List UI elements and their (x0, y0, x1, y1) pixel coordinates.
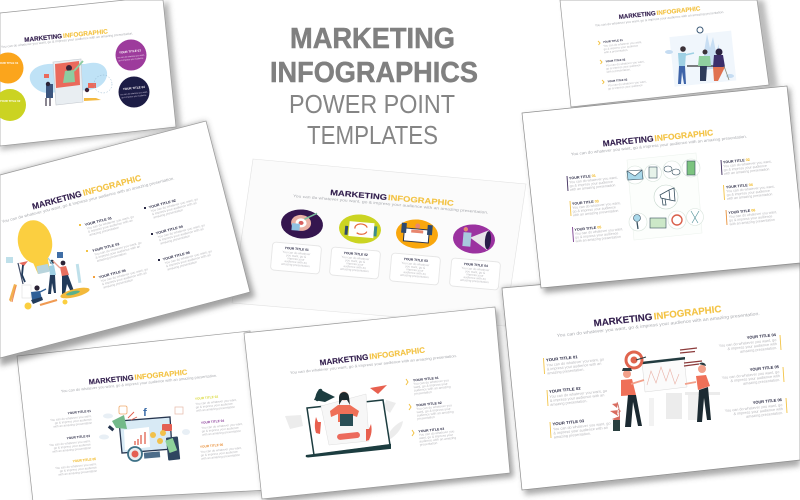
heading (88, 367, 188, 386)
right list: & impress your audience with (727, 342, 777, 351)
right list: with an amazing presentation (202, 429, 241, 437)
icon circle: cycle board (338, 213, 382, 245)
left list: 05 (597, 225, 601, 230)
card 4: YOUR TITLE 04 (464, 262, 488, 268)
right list: YOUR TITLE 04 (201, 419, 225, 425)
list: You can do whatever you (413, 378, 449, 386)
subtitle: You can do whatever you want, go & impress your audience with an amazing presentation. (595, 10, 725, 27)
icon circle: target (280, 208, 324, 240)
left list: amazing presentation. (550, 399, 588, 407)
list items: go & impress your audience (603, 44, 639, 51)
right list: with an amazing presentation (727, 192, 773, 201)
circle: navy (118, 76, 150, 108)
slide: bottom right presentation (502, 262, 800, 495)
subtitle: You can do whatever you want, go & impress your audience with an amazing presentation. (557, 311, 760, 338)
right list (195, 393, 244, 461)
card 2: impress your (346, 261, 364, 267)
heading: INFOGRAPHIC (134, 367, 188, 382)
left list: You can do whatever you want, go (546, 357, 604, 367)
illustration: social media tablet (30, 59, 112, 106)
right list: YOUR TITLE 06 (200, 443, 224, 449)
list: amazing presentation (96, 251, 127, 263)
illustration: team presenting chart (610, 348, 720, 431)
circle: navy: YOUR TITLE 04 (123, 85, 145, 91)
left list: with an amazing presentation (53, 421, 93, 429)
list: & impress your audience with an (95, 244, 141, 260)
list: amazing presentation (167, 260, 198, 271)
heading: MARKETING (88, 373, 134, 386)
slide: center four circles (232, 159, 526, 326)
slide: right outline icons (522, 86, 800, 293)
card 2 (329, 247, 381, 279)
card 2: You can do whatever (341, 255, 370, 261)
list: audience with an amazing (419, 436, 457, 444)
circle: purple (116, 40, 146, 70)
card 2: YOUR TITLE 02 (344, 251, 368, 257)
list: & impress your audience with an (152, 201, 197, 216)
right list: YOUR TITLE (728, 209, 751, 215)
list: YOUR TITLE 02 (148, 199, 176, 209)
right list: amazing presentation. (743, 378, 780, 386)
card 1: amazing presentation (281, 262, 310, 268)
main title: POWER POINT (289, 91, 455, 119)
list: & impress your audience with an (88, 218, 133, 234)
list items: with a presentation. (604, 48, 629, 54)
heading: INFOGRAPHIC (369, 346, 426, 361)
list (79, 193, 214, 290)
list: You can do whatever you want, go (157, 223, 206, 239)
list: want, go & impress your (416, 407, 452, 414)
left list: & impress your audience with an (550, 393, 605, 403)
card 2: you want, go & (345, 258, 365, 264)
left list: You can do whatever you want, (569, 176, 618, 184)
left list: amazing presentation. (547, 368, 585, 375)
heading: INFOGRAPHIC (388, 193, 455, 208)
circle: navy: go & impress your audience (122, 95, 147, 99)
list: & impress your audience with an (166, 253, 211, 268)
left list: YOUR TITLE 01 (546, 354, 579, 362)
list: YOUR TITLE 04 (155, 225, 183, 235)
list: YOUR TITLE 06 (162, 251, 190, 261)
heading (24, 28, 109, 44)
card 4: audience with an (463, 275, 486, 281)
main title: INFOGRAPHICS (270, 57, 478, 89)
right list: You can do whatever you want, (726, 185, 775, 193)
right list: You can do whatever you want, (201, 422, 243, 430)
heading: INFOGRAPHIC (63, 28, 109, 40)
card 3: You can do whatever (401, 261, 430, 267)
card 3: YOUR TITLE 03 (404, 257, 428, 263)
left list: go & impress your audience (572, 205, 616, 214)
main title: MARKETING (290, 23, 455, 55)
right list: You can do whatever you want, go (719, 338, 777, 348)
left list: & impress your audience with an (547, 362, 602, 371)
circle: orange (0, 52, 24, 84)
left list (48, 409, 98, 477)
heading: INFOGRAPHIC (82, 173, 142, 198)
left list: with an amazing presentation (58, 469, 98, 477)
circle: navy: You can do whatever you want, (120, 91, 148, 96)
list: YOUR TITLE 01 (84, 216, 112, 227)
list: You can do whatever you want, go (164, 249, 213, 265)
slide: bottom left monitor (17, 331, 278, 500)
left list: with an amazing presentation (575, 235, 621, 243)
heading: MARKETING (602, 133, 654, 148)
list: amazing presentation (103, 278, 134, 289)
right list: go & impress your audience (729, 214, 773, 223)
right list: with an amazing presentation (729, 218, 775, 226)
card 1: You can do whatever (282, 250, 311, 256)
list: You can do whatever you (419, 429, 455, 437)
list: want, go & impress your (419, 433, 454, 440)
card 2: amazing presentation (340, 267, 369, 273)
left list: YOUR TITLE 05 (72, 457, 96, 463)
right list: go & impress your audience (202, 426, 239, 433)
left list: YOUR TITLE (569, 174, 592, 180)
illustration: marketing outline icons (626, 153, 704, 240)
left list: You can do whatever you want, (572, 201, 621, 210)
left list: go & impress your audience (60, 465, 97, 473)
slide: bottom center megaphone laptop (244, 307, 514, 500)
list: & impress your audience with an (159, 227, 204, 242)
left list: YOUR TITLE (574, 226, 597, 232)
list items: with a presentation. (606, 67, 631, 74)
list items: YOUR TITLE 02 (605, 57, 626, 63)
illustration: marketing monitor (99, 406, 190, 461)
heading: MARKETING (319, 353, 369, 367)
left list (567, 172, 624, 243)
list: & impress your audience with an (102, 271, 147, 286)
list: amazing presentation (153, 208, 184, 219)
left list: You can do whatever you want, (575, 227, 623, 236)
left list: YOUR TITLE (572, 200, 595, 206)
main title: TEMPLATES (307, 122, 438, 150)
illustration: megaphone woman on laptop (285, 385, 403, 456)
heading (31, 173, 142, 211)
list: amazing presentation (160, 234, 191, 245)
slide: left light bulb (0, 121, 255, 366)
right list: & impress your audience with (733, 407, 783, 416)
subtitle: You can do whatever you want, go & impress your audience with an amazing presentation. (571, 134, 747, 156)
left list: 03 (595, 199, 599, 204)
heading: INFOGRAPHIC (656, 5, 701, 17)
left list: You can do whatever you want, go (553, 421, 611, 431)
left list: go & impress your audience (569, 180, 613, 188)
card 4 (449, 258, 501, 290)
list: want, go & impress your (413, 382, 449, 389)
heading: MARKETING (24, 33, 63, 44)
right list (718, 332, 787, 421)
left list: go & impress your audience (54, 442, 91, 450)
left list: YOUR TITLE 02 (549, 386, 582, 394)
left list: & impress your audience with an (553, 426, 608, 435)
right list: YOUR TITLE (726, 183, 749, 189)
right list: with an amazing presentation (724, 167, 770, 176)
right list: 04 (749, 183, 753, 187)
left list: go & impress your audience (575, 231, 619, 240)
list items: YOUR TITLE 03 (607, 77, 628, 83)
card 1: impress your (287, 256, 305, 262)
right list: YOUR TITLE 04 (746, 332, 777, 340)
list: You can do whatever you (416, 403, 452, 411)
heading: MARKETING (618, 10, 656, 21)
card 1 (270, 242, 322, 274)
subtitle: You can do whatever you want, go & impress your audience with an amazing presentation. (290, 354, 457, 375)
right list: YOUR TITLE (723, 158, 746, 164)
list: presentation (414, 390, 432, 396)
right list (721, 156, 778, 226)
card 1: you want, go & (286, 253, 306, 259)
circle: purple: YOUR TITLE 03 (119, 48, 141, 55)
card 4: amazing presentation (460, 278, 489, 284)
right list: go & impress your audience (723, 164, 767, 172)
left list: You can do whatever you want, go (549, 389, 607, 399)
card 4: you want, go & (465, 269, 485, 275)
right list: with an amazing presentation (196, 405, 235, 413)
illustration: team at a table (665, 27, 736, 87)
list items: You can do whatever you want, (603, 40, 642, 48)
heading: MARKETING (31, 188, 83, 211)
card 4: impress your (466, 272, 484, 278)
left list: YOUR TITLE 03 (66, 434, 90, 440)
illustration: marketing monitor: f (143, 407, 147, 419)
right list: You can do whatever you want, (723, 160, 772, 168)
card 1: audience with an (284, 259, 307, 265)
heading (330, 188, 455, 208)
circle: lime (0, 89, 26, 121)
heading (593, 304, 722, 329)
right list: You can do whatever you want, go (725, 403, 783, 413)
list: You can do whatever you want, go (86, 214, 135, 231)
card 3: audience with an (403, 270, 426, 276)
card 4: You can do whatever (461, 266, 490, 272)
left list: with an amazing presentation (52, 446, 92, 454)
left list: 01 (592, 174, 596, 178)
card 3: amazing presentation (400, 273, 429, 279)
list: presentation (417, 415, 435, 421)
heading (319, 346, 426, 367)
left list: YOUR TITLE 01 (67, 409, 91, 415)
main title (270, 23, 478, 150)
right list: with an amazing presentation (201, 453, 240, 461)
heading: MARKETING (593, 312, 653, 329)
list: YOUR TITLE 02 (416, 401, 442, 407)
card 2: audience with an (343, 264, 366, 270)
heading: INFOGRAPHIC (654, 127, 714, 143)
icon circle: megaphone (452, 223, 496, 255)
list items (598, 36, 647, 91)
circle: purple: go & impress your audience (119, 58, 144, 62)
right list: YOUR TITLE 05 (749, 364, 780, 372)
list items: go & impress your audience (606, 63, 641, 71)
right list: & impress your audience with (730, 374, 780, 383)
left list: go & impress your audience (55, 417, 92, 425)
right list: go & impress your audience (201, 450, 238, 457)
list: You can do whatever you want, go (150, 197, 199, 213)
card 3 (389, 253, 441, 285)
slide: top left circles (0, 0, 181, 150)
circle: purple: You can do whatever you want, (117, 54, 145, 59)
left list: You can do whatever you want, (55, 462, 97, 470)
left list (544, 351, 612, 439)
right list: go & impress your audience (196, 402, 233, 409)
left list: YOUR TITLE 03 (552, 418, 585, 426)
right list: amazing presentation. (740, 346, 777, 354)
icon circle: phone (395, 218, 439, 250)
list (406, 375, 457, 447)
heading (618, 5, 701, 21)
right list: You can do whatever you want, (729, 210, 777, 219)
subtitle: You can do whatever you want, go & impress your audience with an amazing presentation. (293, 194, 489, 215)
list: YOUR TITLE 01 (413, 376, 439, 382)
right list: You can do whatever you want, go (722, 370, 780, 380)
list items: You can do whatever you want, (606, 59, 645, 67)
subtitle: You can do whatever you want, go & impress your audience with an amazing presentation. (1, 31, 134, 49)
subtitle: You can do whatever you want, go & impress your audience with an amazing presentation. (61, 374, 217, 393)
right list: 06 (751, 208, 755, 213)
subtitle: You can do whatever you want, go & impress your audience with an amazing presentation. (1, 175, 175, 224)
list: audience with an amazing (417, 410, 454, 418)
heading: MARKETING (330, 188, 387, 202)
list: audience with an amazing (414, 385, 451, 393)
list: You can do whatever you want, go (100, 267, 149, 283)
list items: You can do whatever you want, (608, 79, 647, 87)
list: YOUR TITLE 03 (92, 242, 120, 253)
right list: go & impress your audience (726, 189, 770, 197)
list: YOUR TITLE 05 (98, 269, 126, 279)
left list: with an amazing presentation (570, 183, 616, 192)
right list: You can do whatever you want, (200, 446, 242, 454)
left list: You can do whatever you want, (49, 439, 91, 447)
slide: top right team meeting (560, 0, 778, 112)
left list: with an amazing presentation (573, 209, 619, 217)
list: presentation (420, 441, 438, 447)
left list: amazing presentation. (554, 432, 591, 439)
card 1: YOUR TITLE 01 (285, 246, 309, 252)
card 3: you want, go & (405, 264, 425, 270)
right list: You can do whatever you want, (195, 398, 237, 406)
right list: 02 (746, 158, 750, 162)
right list: YOUR TITLE 06 (752, 397, 783, 405)
heading (602, 127, 714, 148)
card 3: impress your (406, 267, 424, 273)
right list: YOUR TITLE 02 (195, 395, 219, 401)
list items: go & impress your audience (608, 83, 643, 91)
heading: INFOGRAPHIC (653, 304, 722, 323)
list: YOUR TITLE 03 (418, 427, 445, 433)
illustration: light bulb and team (6, 217, 91, 310)
right list: amazing presentation. (746, 411, 783, 419)
circle: lime: YOUR TITLE 02 (0, 99, 21, 103)
left list: You can do whatever you want, (50, 414, 92, 422)
list items: YOUR TITLE 01 (603, 38, 623, 44)
list: amazing presentation (89, 225, 120, 237)
list: You can do whatever you want, go (94, 240, 142, 257)
